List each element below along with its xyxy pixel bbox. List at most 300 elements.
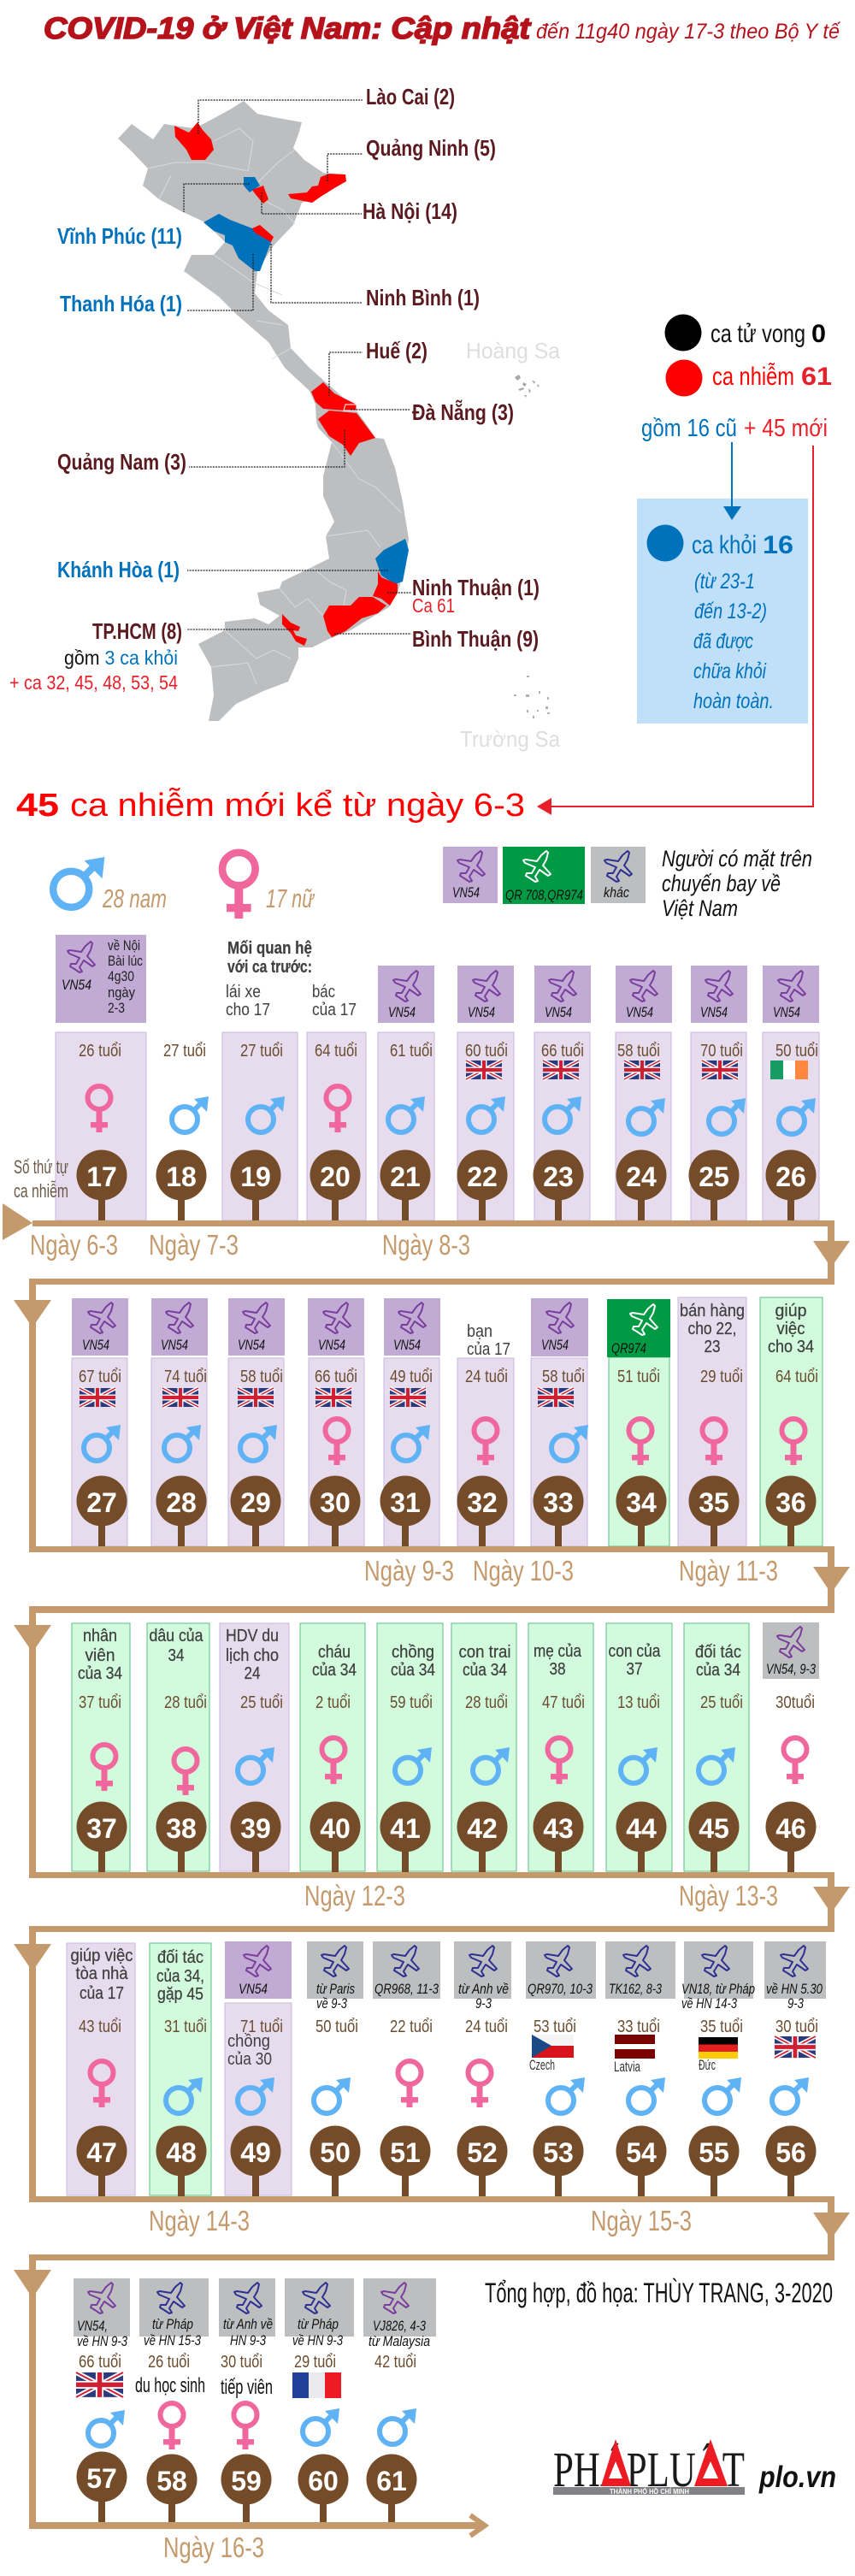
age: 71 tuổi	[240, 2018, 283, 2036]
flight tag	[74, 2278, 130, 2337]
date: 6-3: Ngày 6-3	[30, 1229, 118, 1261]
relation: con trai	[458, 1643, 511, 1662]
case 55: VN18, từ Pháp	[681, 1981, 755, 1997]
gender	[474, 1419, 498, 1465]
badge	[156, 1149, 207, 1220]
relationship note: với ca trước:	[227, 958, 312, 977]
case 52	[454, 1941, 511, 2196]
age: 74 tuổi	[164, 1368, 207, 1386]
age: 70 tuổi	[700, 1042, 743, 1061]
case 50: từ Paris	[316, 1981, 355, 1997]
card	[528, 1623, 593, 1871]
gender	[395, 1747, 432, 1783]
case 23: VN54	[545, 1004, 572, 1020]
case 44	[606, 1623, 672, 1872]
gender	[314, 2077, 351, 2113]
relation	[534, 1642, 582, 1679]
logo: Pháp Luật: THÀNH PHỐ HỒ CHÍ MINH	[610, 2487, 689, 2496]
age: 33 tuổi	[617, 2018, 660, 2036]
flight note: ngày	[108, 984, 135, 1001]
legend: female: 17 nữ	[266, 883, 315, 913]
relation	[227, 2032, 272, 2069]
card	[309, 1358, 364, 1546]
number: 56	[775, 2137, 806, 2168]
flight tag	[605, 1941, 675, 1999]
number: 32	[467, 1487, 498, 1518]
relation: 24	[245, 1664, 260, 1683]
recovered note: đã được	[693, 629, 753, 653]
case 52: 9-3	[475, 1995, 492, 2012]
gender	[248, 1096, 285, 1132]
legend: flights: khác	[604, 884, 629, 901]
badge	[689, 1801, 739, 1872]
case 55: về HN 14-3	[681, 1995, 737, 2012]
relation: gặp 45	[157, 1985, 203, 2004]
number: 52	[467, 2137, 498, 2168]
flag: Latvia	[615, 2035, 655, 2059]
case 39	[220, 1623, 289, 1872]
flight tag	[308, 1298, 364, 1356]
case 48	[150, 1943, 211, 2196]
badge	[156, 1801, 207, 1872]
age: 2 tuổi	[315, 1693, 351, 1712]
card	[684, 1623, 749, 1871]
timeline row 3	[14, 1606, 850, 1932]
recovered note	[693, 570, 774, 713]
badge	[310, 1476, 361, 1546]
card	[384, 1358, 439, 1546]
timeline row 2	[14, 1279, 850, 1613]
recovered number: 16	[763, 531, 793, 559]
number: 27	[86, 1487, 117, 1518]
gender	[234, 2403, 256, 2449]
age: 25 tuổi	[240, 1693, 283, 1712]
flag	[238, 1388, 274, 1407]
badge	[231, 1801, 280, 1872]
flight tag	[457, 966, 514, 1023]
country: Czech	[529, 2057, 555, 2073]
age: 64 tuổi	[315, 1042, 357, 1061]
case 54	[605, 1941, 675, 2196]
number: 44	[626, 1813, 657, 1844]
badge	[366, 2455, 417, 2525]
relation: tòa nhà	[75, 1964, 128, 1983]
badge	[766, 2126, 816, 2196]
age: 27 tuổi	[240, 1042, 283, 1061]
flag: Germany	[699, 2037, 738, 2059]
relation: HDV du	[226, 1627, 279, 1645]
legend: infected: ca nhiễm	[712, 363, 794, 391]
label: Ca 61: Ca 61	[412, 594, 455, 617]
badge	[457, 1801, 508, 1872]
badge	[310, 1801, 361, 1872]
flag: Ireland	[770, 1061, 808, 1079]
flight tag	[763, 1622, 819, 1679]
gender	[709, 1098, 746, 1134]
gender	[325, 1419, 349, 1465]
islands: Hoàng Sa: Hoàng Sa	[466, 338, 560, 363]
case 54: TK162, 8-3	[609, 1981, 662, 1997]
case 57: về HN 9-3	[77, 2333, 127, 2349]
relation	[609, 1642, 661, 1679]
case 22	[457, 966, 514, 1220]
flag	[702, 1061, 738, 1079]
card	[616, 1032, 671, 1220]
flight note: 4g30	[108, 968, 134, 984]
case 29: VN54	[238, 1337, 265, 1353]
card	[378, 1032, 434, 1220]
number: 26	[775, 1161, 806, 1192]
label: Quảng Ninh: Quảng Ninh (5)	[366, 135, 496, 161]
case 61: từ Malaysia	[369, 2333, 430, 2349]
relation	[226, 983, 270, 1019]
gender	[551, 1425, 588, 1461]
case 60	[285, 2278, 354, 2525]
gender	[779, 1098, 816, 1134]
relationship note	[227, 939, 312, 977]
relation: dâu của	[149, 1627, 203, 1645]
relation	[680, 1302, 745, 1356]
label: Hà Nội: Hà Nội (14)	[363, 198, 457, 224]
label: TP.HCM: TP.HCM (8)	[92, 618, 182, 644]
recovered note: đến 13-2)	[694, 600, 767, 623]
badge	[231, 1476, 280, 1546]
legend note: Việt Nam	[662, 895, 738, 921]
label: Vĩnh Phúc: Vĩnh Phúc (11)	[57, 223, 182, 249]
card	[457, 1032, 514, 1220]
badge	[534, 1149, 583, 1220]
recovered count: ca khỏi	[692, 531, 757, 559]
badge	[616, 1476, 667, 1546]
card	[606, 1623, 672, 1871]
number: 57	[86, 2463, 117, 2494]
relation: lái xe	[226, 983, 261, 1001]
age: 66 tuổi	[79, 2353, 121, 2372]
gender	[628, 1098, 665, 1134]
flight tag	[363, 2278, 436, 2337]
card	[307, 1032, 366, 1220]
flight tag	[72, 1298, 128, 1356]
case 50: về 9-3	[316, 1995, 347, 2012]
date: 7-3: Ngày 7-3	[149, 1229, 239, 1261]
map: Thanh Hóa	[203, 214, 271, 271]
number: 34	[626, 1487, 657, 1518]
flight tag	[607, 1299, 670, 1357]
number: 33	[543, 1487, 574, 1518]
flag	[76, 2372, 123, 2397]
relation: 37	[626, 1660, 643, 1679]
date: 16-3: Ngày 16-3	[163, 2532, 264, 2563]
number: 39	[240, 1813, 271, 1844]
case 53: QR970, 10-3	[528, 1981, 593, 1997]
label: Ninh Thuận: Ninh Thuận (1)	[412, 575, 540, 600]
number: 45	[699, 1813, 729, 1844]
case 18	[156, 1042, 209, 1220]
legend note: chuyến bay về	[662, 871, 781, 896]
arrow: to new cases	[537, 446, 813, 815]
legend: female	[222, 853, 315, 919]
case 49	[225, 1941, 292, 2196]
age: 50 tuổi	[315, 2018, 358, 2036]
age: 25 tuổi	[700, 1693, 743, 1712]
case 55	[681, 1941, 755, 2196]
case 42	[451, 1623, 516, 1872]
date: 8-3: Ngày 8-3	[382, 1229, 470, 1261]
case 53	[526, 1941, 596, 2196]
case 59	[219, 2278, 275, 2525]
flight note: Bài lúc	[108, 953, 143, 969]
case 33	[531, 1298, 588, 1546]
heading: new cases: 45	[16, 788, 59, 824]
relation	[695, 1643, 741, 1680]
title: đến 11g40 ngày 17-3 theo Bộ Y tế	[536, 20, 841, 44]
badge	[616, 1801, 667, 1872]
case 26: VN54	[773, 1004, 800, 1020]
badge	[156, 1476, 207, 1546]
age: 22 tuổi	[390, 2018, 433, 2036]
map: Hà Nội	[252, 186, 268, 204]
gender	[398, 2061, 421, 2107]
number: 54	[626, 2137, 657, 2168]
number: 18	[166, 1161, 197, 1192]
gender	[327, 1086, 349, 1132]
number: 41	[390, 1813, 421, 1844]
gender	[548, 2077, 585, 2113]
map: Vĩnh Phúc	[244, 177, 260, 192]
age: 29 tuổi	[294, 2353, 336, 2372]
badge	[310, 1149, 361, 1220]
case 22: VN54	[468, 1004, 495, 1020]
legend: flights: VN54	[452, 884, 480, 901]
map: Đà Nẵng	[344, 405, 357, 411]
legend: infected	[665, 359, 832, 397]
breakdown text	[641, 415, 828, 442]
badge	[77, 2451, 127, 2522]
logo: Pháp Luật: PHÁPLUẬT	[553, 2442, 745, 2497]
case 19	[222, 983, 298, 1220]
label: Quảng Nam: Quảng Nam (3)	[57, 449, 186, 475]
case 30	[308, 1298, 364, 1546]
card	[151, 1358, 207, 1546]
country: Latvia	[614, 2059, 640, 2075]
card	[72, 1623, 130, 1871]
flight tag	[616, 966, 672, 1023]
age: 24 tuổi	[465, 2018, 508, 2036]
number: 35	[699, 1487, 729, 1518]
card	[377, 1623, 443, 1871]
map: Ninh Thuận	[373, 571, 398, 606]
age: 43 tuổi	[79, 2018, 121, 2036]
age: 66 tuổi	[541, 1042, 584, 1061]
case 24: VN54	[626, 1004, 653, 1020]
relation: bạn	[467, 1322, 492, 1341]
relation: việc	[776, 1320, 805, 1338]
gender	[783, 1738, 807, 1784]
relation: của 17	[467, 1340, 510, 1359]
age: 24 tuổi	[465, 1368, 508, 1386]
age: 29 tuổi	[700, 1368, 743, 1386]
gender	[621, 1747, 657, 1783]
legend: deaths: 0	[811, 320, 826, 348]
age: 67 tuổi	[79, 1368, 121, 1386]
case 61: VJ826, 4-3	[373, 2318, 426, 2334]
case 32	[457, 1322, 514, 1546]
badge	[534, 1476, 583, 1546]
case 56: về HN 5.30	[766, 1981, 823, 1997]
recovered note: hoàn toàn.	[693, 689, 774, 713]
map: Ninh Bình	[252, 225, 274, 242]
recovered note: (từ 23-1	[694, 570, 755, 594]
flight note	[108, 937, 143, 1016]
number: 23	[543, 1161, 574, 1192]
relation: của 34,	[156, 1967, 204, 1986]
number: 42	[467, 1813, 498, 1844]
number: 17	[86, 1161, 117, 1192]
recovered box	[637, 499, 808, 724]
relation: 23	[705, 1338, 720, 1356]
relation: mẹ của	[534, 1642, 582, 1661]
arrow: to recovered	[723, 442, 741, 520]
case 25	[689, 966, 747, 1220]
map: Bình Thuận	[323, 597, 386, 637]
relation: của 17	[312, 1001, 357, 1019]
case 43	[528, 1623, 593, 1872]
number: 40	[320, 1813, 351, 1844]
label: TP.HCM cases: + ca 32, 45, 48, 53, 54	[9, 671, 178, 694]
relation: 34	[168, 1646, 185, 1665]
gender	[781, 1419, 805, 1465]
case 59: từ Anh về	[223, 2316, 273, 2332]
case 56	[764, 1941, 826, 2196]
flag	[775, 2036, 816, 2058]
legend: flights: QR 708,QR974	[505, 887, 583, 903]
occupation: tiếp viên	[221, 2376, 273, 2399]
gender	[91, 2061, 113, 2107]
badge	[221, 2455, 272, 2525]
badge	[689, 1476, 739, 1546]
relation: 38	[549, 1660, 566, 1679]
card	[763, 1032, 819, 1220]
recovered note: chữa khỏi	[693, 659, 767, 683]
case 31: VN54	[393, 1337, 421, 1353]
card	[531, 1358, 587, 1546]
flight tag	[151, 1298, 208, 1356]
badge	[534, 2126, 583, 2196]
case number caption: Số thứ tự	[14, 1156, 68, 1178]
age: 64 tuổi	[775, 1368, 818, 1386]
flag: Czech	[532, 2035, 574, 2058]
number: 53	[543, 2137, 574, 2168]
breakdown text: gồm 16 cũ	[641, 415, 737, 442]
relation	[156, 1948, 204, 2004]
relation: của 34	[391, 1661, 435, 1680]
age: 49 tuổi	[390, 1368, 433, 1386]
gender	[166, 2077, 203, 2113]
case 45	[684, 1623, 749, 1872]
gender	[161, 2403, 183, 2449]
badge	[231, 2126, 280, 2196]
case 27	[72, 1298, 128, 1546]
age: 28 tuổi	[465, 1693, 508, 1712]
flag	[624, 1061, 660, 1079]
gender	[88, 2410, 125, 2446]
relation	[391, 1643, 435, 1680]
card	[147, 1623, 209, 1871]
flight note: về Nội	[108, 937, 140, 954]
relation: của 34	[78, 1664, 122, 1683]
case 46: VN54, 9-3	[766, 1661, 816, 1677]
relation	[70, 1947, 133, 2003]
gender	[87, 1086, 111, 1132]
relation: cho 17	[226, 1001, 270, 1019]
case 58: về HN 15-3	[144, 2332, 201, 2349]
badge	[310, 2126, 361, 2196]
date: 14-3: Ngày 14-3	[149, 2205, 250, 2236]
case 25: VN54	[700, 1004, 728, 1020]
gender	[547, 1738, 571, 1784]
badge	[380, 1149, 431, 1220]
card	[150, 1943, 211, 2195]
badge	[380, 2126, 431, 2196]
flight note: 2-3	[108, 1000, 125, 1016]
badge	[156, 2126, 207, 2196]
case 41	[377, 1623, 443, 1872]
badge	[77, 2126, 127, 2196]
card	[228, 1358, 284, 1546]
flight tag	[373, 1941, 440, 1999]
badge	[298, 2455, 349, 2525]
number: 36	[775, 1487, 806, 1518]
case 21	[378, 966, 434, 1220]
age: 30tuổi	[775, 1693, 815, 1712]
age: 51 tuổi	[617, 1368, 660, 1386]
flight tag	[225, 1941, 292, 1999]
gender	[238, 1747, 274, 1783]
flight tag	[763, 966, 819, 1023]
badge	[457, 2126, 508, 2196]
gender	[705, 2077, 741, 2113]
age: 47 tuổi	[542, 1693, 585, 1712]
province labels	[9, 84, 540, 694]
relation: của 17	[80, 1984, 124, 2003]
map: Quảng Nam	[318, 411, 375, 456]
gender	[473, 1747, 510, 1783]
relation: lịch cho	[226, 1646, 279, 1665]
case 21: VN54	[388, 1004, 416, 1020]
age: 53 tuổi	[534, 2018, 576, 2036]
number: 59	[231, 2466, 262, 2496]
relation	[78, 1627, 122, 1683]
relation	[312, 983, 357, 1019]
number: 48	[166, 2137, 197, 2168]
flight tag	[56, 935, 146, 1023]
relation	[768, 1302, 814, 1356]
case 58: từ Pháp	[152, 2316, 193, 2332]
gender	[699, 1747, 735, 1783]
badge	[77, 1801, 127, 1872]
country: Đức	[699, 2057, 716, 2073]
flight tag	[139, 2278, 209, 2337]
gender	[380, 2408, 416, 2444]
title: COVID-19 ở Việt Nam: Cập nhật	[44, 12, 531, 45]
badge	[457, 1149, 508, 1220]
date: 15-3: Ngày 15-3	[591, 2205, 692, 2236]
flight tag	[534, 966, 591, 1023]
number: 25	[699, 1161, 729, 1192]
age: 66 tuổi	[315, 1368, 357, 1386]
case 46	[763, 1622, 819, 1872]
gender	[172, 1096, 209, 1132]
